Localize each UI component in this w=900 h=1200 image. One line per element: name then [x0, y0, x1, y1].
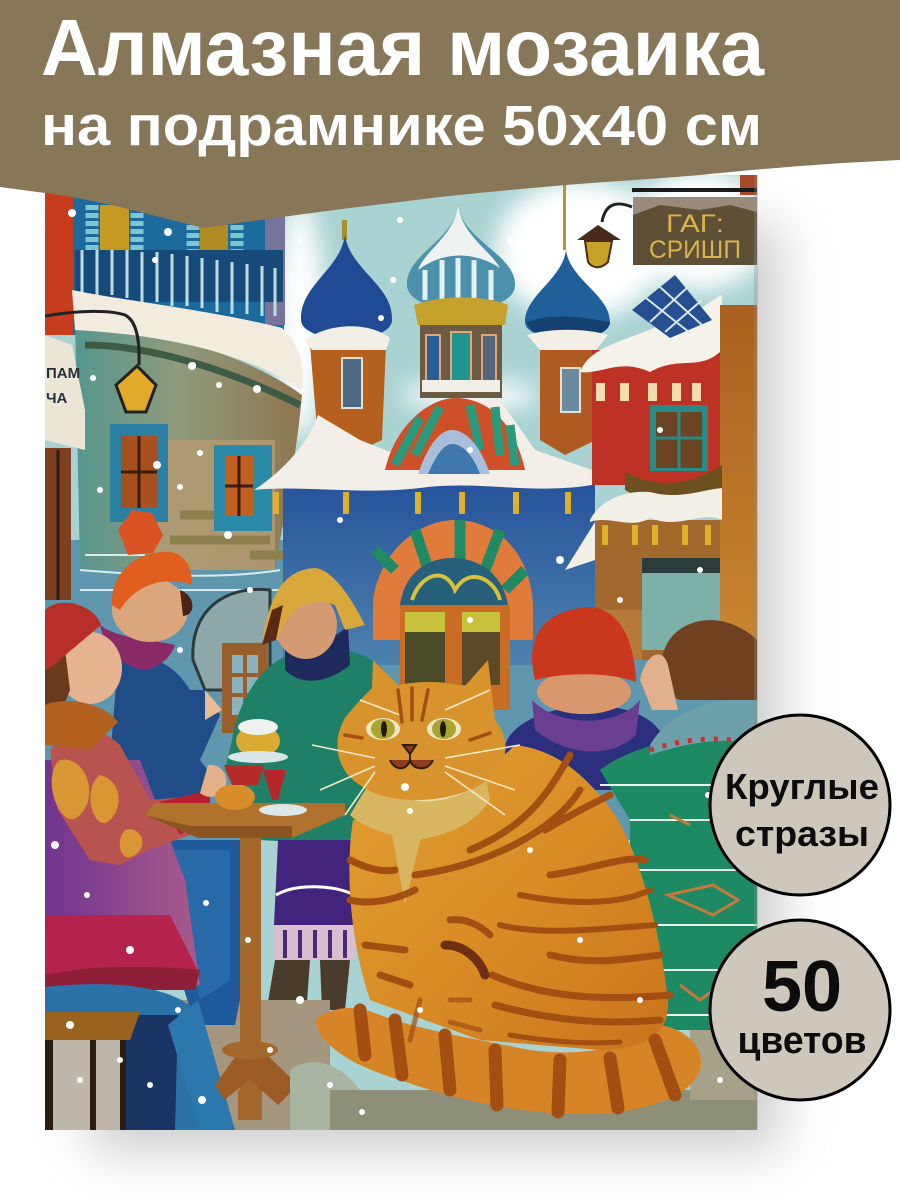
badge: 50 colours: цветов [738, 1020, 866, 1062]
cat chest fur [350, 745, 490, 905]
left hanging sign [45, 335, 85, 600]
lower brick building [595, 520, 720, 660]
painting: winter cafe with ginger cat [45, 170, 770, 1130]
top banner [0, 0, 900, 228]
cat whiskers [312, 690, 520, 815]
left dome [301, 220, 392, 455]
centre dome [407, 205, 515, 398]
hanging lantern right [577, 204, 632, 267]
red building [592, 350, 722, 485]
left background bottom [53, 1040, 120, 1130]
canvas shadow [90, 225, 780, 1150]
church arch mosaic [385, 398, 525, 470]
cafe sign: ГАГ: [666, 210, 724, 238]
person: woman in red hat [505, 607, 662, 790]
church snow roof [254, 400, 592, 491]
tall brick wall [720, 305, 757, 645]
person: woman in green sweater [600, 620, 757, 1030]
cafe door arch [373, 520, 533, 710]
badge: round rhinestones: стразы [735, 813, 869, 854]
badge: round rhinestones: Круглые [725, 766, 879, 807]
person: woman in yellow hat [225, 568, 395, 1030]
church lanterns [276, 492, 568, 514]
pavement under table [175, 1000, 330, 1130]
cat tail [315, 1008, 701, 1114]
blue skirt [170, 840, 240, 1025]
sky [45, 175, 757, 1130]
background street [45, 540, 757, 840]
garland and snow [625, 465, 722, 495]
right buildings [565, 175, 757, 660]
chair [222, 643, 268, 733]
cat body [349, 745, 668, 1050]
cat stripes [345, 688, 675, 1112]
cafe table [145, 719, 345, 1120]
cafe sign [632, 190, 757, 265]
church wall [283, 485, 595, 665]
medallion behind table [193, 589, 270, 690]
ginger cat [312, 660, 701, 1114]
plaid cloth [632, 275, 712, 338]
person: girl in red knit hat and paisley sweater [45, 603, 226, 990]
subtitle: на подрамнике 50х40 см [41, 94, 762, 158]
cat head [337, 660, 506, 800]
legs and stool [45, 984, 235, 1130]
red wall strip [45, 193, 73, 335]
badge: round rhinestones [710, 715, 890, 895]
ground stones [290, 1030, 757, 1130]
badge: 50 colours: 50 [762, 947, 842, 1027]
falling snow [51, 207, 723, 1115]
left street lamp [45, 311, 156, 412]
cafe sign: СРИШП [649, 236, 741, 264]
church [254, 185, 610, 665]
clouds [276, 170, 770, 440]
cat eyes [366, 718, 400, 740]
badge: 50 colours [710, 920, 890, 1100]
left blue building with balcony [73, 197, 285, 335]
round stone tower with snow [72, 290, 303, 590]
person: woman in orange hat [100, 510, 242, 1025]
left hanging sign: ЧА [46, 390, 68, 407]
title: Алмазная мозаика [41, 3, 764, 92]
right dome [525, 185, 610, 455]
left hanging sign: ПАМ [46, 365, 80, 382]
cat nose and mouth [390, 745, 433, 768]
purple skirt [274, 840, 356, 925]
canvas right edge [754, 175, 758, 1130]
